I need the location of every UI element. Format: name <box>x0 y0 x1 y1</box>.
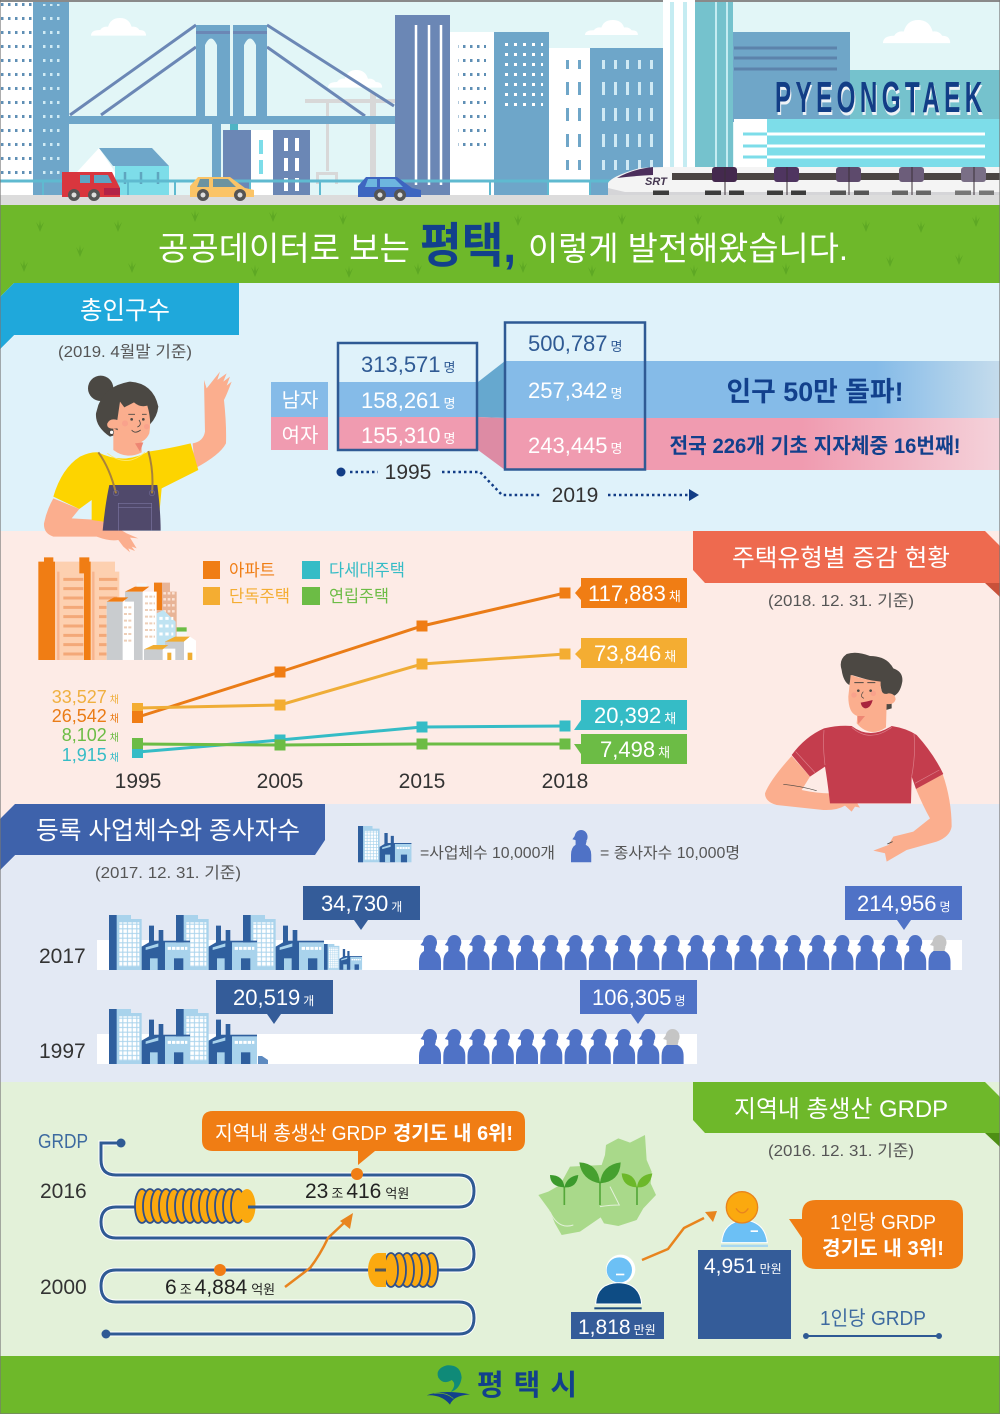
end value: detached <box>575 638 687 668</box>
year labels: 1997 <box>39 1040 86 1063</box>
year labels <box>38 1131 88 1299</box>
heading: 평택, <box>420 220 516 273</box>
subtitle: (2017. 12. 31. 기준) <box>95 864 241 882</box>
heading: 지역내 총생산 GRDP <box>734 1096 948 1123</box>
panel: GRDP <box>38 1082 1000 1339</box>
labels: 남자 <box>282 389 318 412</box>
value 2000: 6조4,884 억원 <box>165 1276 275 1299</box>
panel: housing <box>38 531 1000 793</box>
heading <box>158 220 848 273</box>
title band <box>0 205 1000 283</box>
legend: 아파트 <box>229 561 275 580</box>
heading: 공공데이터로 보는 <box>158 230 410 267</box>
icon: person 2000 <box>594 1255 642 1309</box>
callout: rank 6: 경기도 내 6위! <box>393 1122 513 1145</box>
mid buildings <box>223 0 1000 195</box>
year labels: GRDP <box>38 1131 88 1153</box>
end value: apartment: 117,883채 <box>588 581 681 606</box>
legend: 연립주택 <box>329 587 389 606</box>
2019 values: 243,445명 <box>528 433 622 458</box>
heading: 주택유형별 증감 현황 <box>732 545 950 572</box>
heading: 이렇게 발전해왔습니다. <box>528 230 848 267</box>
callout: rank 6: 지역내 총생산 GRDP <box>215 1122 387 1145</box>
text: SRT logo: SRT <box>645 176 668 188</box>
caption <box>803 1307 942 1339</box>
markers <box>214 1168 363 1276</box>
callout: rank 3: 1인당 GRDP <box>830 1211 936 1234</box>
subtitle: (2016. 12. 31. 기준) <box>768 1142 914 1160</box>
callout: 50만: 인구 50만 돌파! <box>726 377 904 407</box>
footer <box>0 1356 1000 1414</box>
text: PYEONGTAEK: PYEONGTAEK <box>775 72 987 122</box>
people 2017 <box>419 935 950 970</box>
end value: detached: 73,846채 <box>594 641 676 666</box>
heading: 총인구수: 총인구수 <box>80 297 170 325</box>
legend <box>203 561 405 606</box>
icon: crane <box>305 93 395 195</box>
icon: blue car <box>358 177 421 201</box>
labels: 여자 <box>282 424 318 447</box>
callout: 106,305 <box>580 980 697 1024</box>
legend <box>358 826 740 862</box>
axis labels <box>115 770 588 793</box>
2019 values <box>528 331 622 458</box>
timeline arrow: 2019 <box>552 484 598 507</box>
1995 values <box>361 352 456 448</box>
legend: = 종사자수 10,000명 <box>600 844 740 862</box>
heading <box>0 804 325 870</box>
start values: 26,542 채 <box>52 706 119 726</box>
callout: rank 3 <box>789 1200 963 1269</box>
start values: 1,915 채 <box>62 745 119 765</box>
icon: apartments <box>38 557 196 660</box>
callout: 214,956: 214,956명 <box>857 891 951 916</box>
callout: rank 6 <box>202 1111 525 1165</box>
coil 2016 <box>135 1189 258 1223</box>
serpentine line <box>101 1138 474 1338</box>
heading <box>693 1082 1000 1147</box>
callout: 34,730 <box>303 886 420 930</box>
start values: 8,102 채 <box>62 725 119 745</box>
caption: 1인당 GRDP <box>820 1307 926 1330</box>
end value: multiplex: 20,392채 <box>594 703 676 728</box>
road <box>0 195 1000 205</box>
legend: 다세대주택 <box>329 561 405 580</box>
1995 values: 155,310명 <box>361 423 456 448</box>
timeline arrow: 1995 <box>385 461 431 484</box>
callout: rank 3: 경기도 내 3위! <box>822 1237 944 1260</box>
2019 values: 500,787명 <box>528 331 622 356</box>
icon: red van <box>62 172 120 201</box>
end value: row house: 7,498채 <box>600 737 670 762</box>
legend: =사업체수 10,000개 <box>420 844 555 862</box>
callout: 16번째: 전국 226개 기초 지자체중 16번째! <box>670 435 960 458</box>
subtitle: (2019. 4월말 기준) <box>58 343 192 361</box>
bar 1,818: 1,818만원 <box>578 1316 656 1339</box>
legend: 단독주택 <box>229 587 290 606</box>
icon: sprouts <box>550 1162 652 1205</box>
icon: yellow car <box>190 177 254 201</box>
bar 4,951: 4,951만원 <box>704 1255 782 1278</box>
panel: business <box>0 804 962 1064</box>
icon: city logo <box>427 1365 470 1405</box>
factories 1997 <box>109 1009 268 1064</box>
year labels: 2017 <box>39 945 86 968</box>
bands <box>271 322 1000 470</box>
end value: multiplex <box>574 700 687 730</box>
text: 평택시: 평택시 <box>477 1369 577 1402</box>
subtitle: (2018. 12. 31. 기준) <box>768 592 914 610</box>
value 2016: 23조416 억원 <box>305 1180 409 1203</box>
callout: 20,519: 20,519개 <box>233 985 314 1010</box>
heading: 총인구수 <box>0 283 239 349</box>
people 1997 <box>419 1029 684 1064</box>
icon: man <box>765 653 952 862</box>
small house <box>77 148 169 195</box>
section backgrounds <box>0 283 1000 1356</box>
railing <box>0 181 610 195</box>
axis labels: 2005 <box>257 770 303 793</box>
arrow <box>285 1213 353 1287</box>
callout: 34,730: 34,730개 <box>321 891 402 916</box>
1995 values: 313,571명 <box>361 352 456 377</box>
text: PYEONGTAEK: PYEONGTAEK <box>776 75 988 125</box>
year labels: 2016 <box>40 1180 87 1203</box>
callout: 214,956 <box>845 886 962 930</box>
left towers <box>0 2 69 195</box>
train <box>608 167 1000 195</box>
end value: row house <box>574 734 687 764</box>
year labels: 2000 <box>40 1276 87 1299</box>
labels <box>282 389 318 447</box>
icon: person 2016 <box>721 1192 768 1247</box>
bridge <box>69 25 395 184</box>
1995 values: 158,261명 <box>361 388 456 413</box>
icon: woman <box>44 372 232 552</box>
panel: population <box>0 283 1000 507</box>
header illustration <box>0 0 1000 205</box>
line chart <box>52 578 687 793</box>
heading: 등록 사업체수와 종사자수 <box>36 817 300 845</box>
callout: 20,519 <box>216 980 333 1024</box>
axis labels: 2018 <box>542 770 588 793</box>
start values <box>52 687 119 765</box>
2019 values: 257,342명 <box>528 378 622 403</box>
start values: 33,527 채 <box>52 687 119 707</box>
year labels <box>39 945 86 1063</box>
axis labels: 2015 <box>399 770 445 793</box>
bars <box>97 940 962 1064</box>
map <box>538 1135 656 1235</box>
heading <box>693 531 1000 597</box>
bar 4,951 <box>698 1250 791 1339</box>
arrow <box>642 1211 717 1260</box>
factories 2017 <box>109 915 362 970</box>
callout: 106,305: 106,305명 <box>592 985 686 1010</box>
timeline arrow <box>336 461 699 507</box>
end value: apartment <box>575 578 687 608</box>
axis labels: 1995 <box>115 770 161 793</box>
coil 2000 <box>368 1253 438 1287</box>
